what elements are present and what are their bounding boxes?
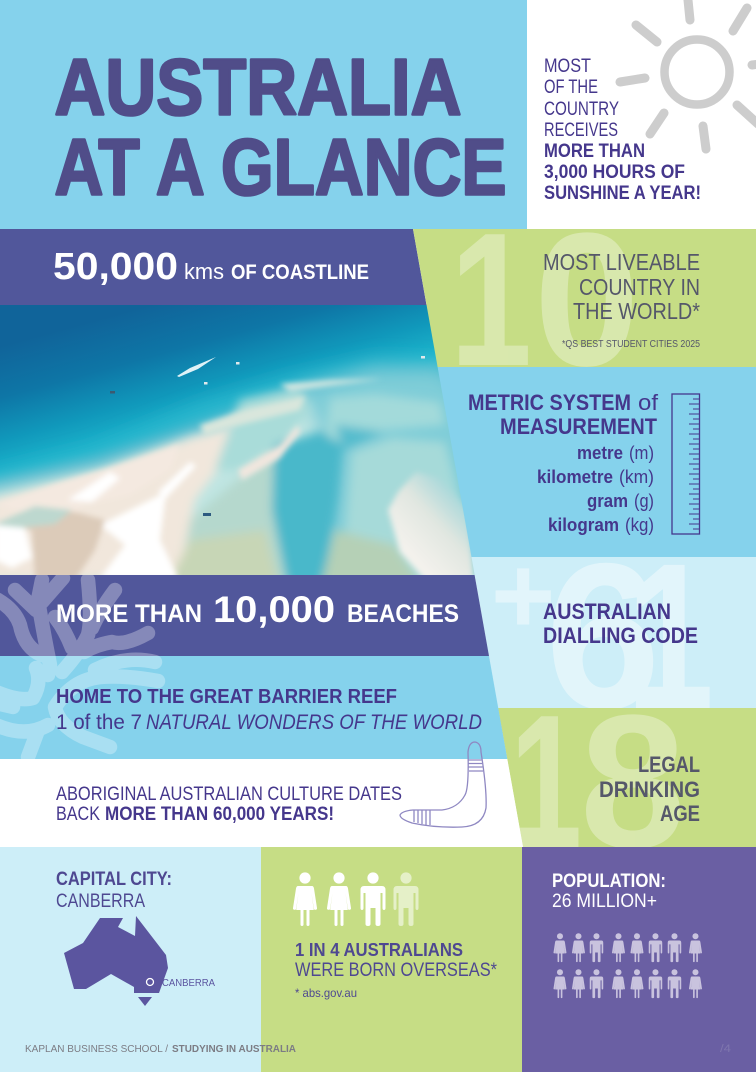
text: beaches: BEACHES xyxy=(347,600,459,628)
number: 10: 1 xyxy=(450,194,532,406)
text: aboriginal culture xyxy=(56,784,402,825)
text: capital city: CANBERRA xyxy=(56,891,145,912)
text: drinking age: DRINKING xyxy=(599,777,700,802)
text: coastline: OF COASTLINE xyxy=(231,261,369,284)
text: reef: NATURAL WONDERS OF THE WORLD xyxy=(146,711,482,734)
text: metric units: (km) xyxy=(619,467,654,487)
text: population xyxy=(552,871,666,912)
panel: population xyxy=(522,847,756,1072)
text: liveable xyxy=(543,249,700,350)
text: metric heading xyxy=(468,390,659,439)
text: metric heading: METRIC SYSTEM xyxy=(468,390,631,415)
panel: coastline banner xyxy=(0,229,426,305)
icon: boomerang xyxy=(400,742,486,827)
text: metric units: gram xyxy=(587,491,628,511)
icon: four people xyxy=(293,872,418,926)
text: sunshine fact xyxy=(544,56,701,204)
panel: liveable country xyxy=(413,229,756,367)
text: beaches xyxy=(56,589,459,630)
number: +61: 1 xyxy=(626,521,714,753)
title xyxy=(54,43,506,212)
text: liveable: *QS BEST STUDENT CITIES 2025 xyxy=(562,339,700,350)
text: reef xyxy=(56,685,482,734)
boat wake xyxy=(177,357,216,377)
footer: /4 xyxy=(720,1043,731,1055)
text: aboriginal culture: BACK xyxy=(56,804,100,825)
text: capital city xyxy=(56,869,172,912)
title: AUSTRALIA xyxy=(54,43,462,132)
text: metric units: (kg) xyxy=(625,515,654,535)
panel: metric system xyxy=(438,367,756,557)
icon: ruler xyxy=(672,394,700,534)
text: sunshine fact: 3,000 HOURS OF xyxy=(544,162,685,183)
icon: coral xyxy=(0,578,158,757)
text: born overseas: * abs.gov.au xyxy=(295,986,357,1000)
text: metric heading: MEASUREMENT xyxy=(500,414,658,439)
icon: population people xyxy=(553,933,702,998)
text: sunshine fact: SUNSHINE A YEAR! xyxy=(544,183,701,204)
text: coastline: 50,000 xyxy=(53,246,178,288)
footer xyxy=(25,1043,731,1055)
text: metric units: metre xyxy=(577,443,623,463)
text: metric units: kilometre xyxy=(537,467,613,487)
text: dialling code: DIALLING CODE xyxy=(543,623,698,648)
panel: aboriginal culture xyxy=(0,759,523,847)
text: liveable: THE WORLD* xyxy=(573,298,700,324)
text: sunshine fact: OF THE xyxy=(544,77,598,98)
text: born overseas: 1 IN 4 AUSTRALIANS xyxy=(295,939,463,960)
panel: title background xyxy=(0,0,527,229)
text: born overseas xyxy=(295,939,498,1000)
text: population: POPULATION: xyxy=(552,871,666,892)
panel: drinking age xyxy=(498,708,756,847)
footer: STUDYING IN AUSTRALIA xyxy=(172,1043,296,1055)
text: metric units: (g) xyxy=(634,491,654,511)
text: sunshine fact: COUNTRY xyxy=(544,99,619,120)
text: capital city: CAPITAL CITY: xyxy=(56,869,172,890)
text: metric units: kilogram xyxy=(548,515,619,535)
panel: beaches banner xyxy=(0,575,489,656)
text: population: 26 MILLION+ xyxy=(552,891,657,912)
text: liveable: MOST LIVEABLE xyxy=(543,249,700,275)
text: drinking age xyxy=(599,752,700,826)
number: +61 xyxy=(496,562,710,708)
text: dialling code: AUSTRALIAN xyxy=(543,599,671,624)
text: sunshine fact: RECEIVES xyxy=(544,120,618,141)
text: coastline: kms xyxy=(184,259,224,284)
text: drinking age: AGE xyxy=(660,801,700,826)
text: aboriginal culture: MORE THAN 60,000 YEARS! xyxy=(105,804,334,825)
text: reef: HOME TO THE GREAT BARRIER REEF xyxy=(56,685,397,708)
panel: reef xyxy=(0,656,507,759)
text: beaches: 10,000 xyxy=(213,589,335,630)
panel: born overseas xyxy=(261,847,522,1072)
number: 18: 1 xyxy=(510,676,582,888)
text: dialling code xyxy=(543,599,698,648)
text: metric units: (m) xyxy=(629,443,654,463)
number: 10 xyxy=(459,232,632,367)
number: 18: 8 xyxy=(580,676,686,888)
text: sunshine fact: MOST xyxy=(544,56,591,77)
text: born overseas: WERE BORN OVERSEAS* xyxy=(295,960,498,981)
number: +61: 6 xyxy=(545,521,661,753)
text: reef: 1 of the 7 xyxy=(56,711,142,734)
text: beaches: MORE THAN xyxy=(56,600,202,628)
text: metric heading: of xyxy=(638,390,659,415)
panel: dialling code xyxy=(472,557,756,708)
text: liveable: COUNTRY IN xyxy=(579,274,700,300)
text: aboriginal culture: ABORIGINAL AUSTRALIAN CULTURE DATES xyxy=(56,784,402,805)
text: sunshine fact: MORE THAN xyxy=(544,141,645,162)
text: drinking age: LEGAL xyxy=(638,752,700,777)
icon: sun xyxy=(620,0,756,149)
number: 18 xyxy=(518,714,680,847)
map: Australia: CANBERRA xyxy=(162,977,215,989)
title: AT A GLANCE xyxy=(54,123,506,212)
panel: sunshine xyxy=(527,0,756,229)
number: 10: 0 xyxy=(534,194,640,406)
photo: aerial beach xyxy=(0,305,475,575)
text: coastline xyxy=(53,246,369,288)
footer: KAPLAN BUSINESS SCHOOL / xyxy=(25,1043,168,1055)
panel: capital city xyxy=(0,847,261,1072)
map: Australia xyxy=(64,916,215,1006)
text: metric units xyxy=(537,443,654,535)
number: +61: + xyxy=(491,534,555,657)
